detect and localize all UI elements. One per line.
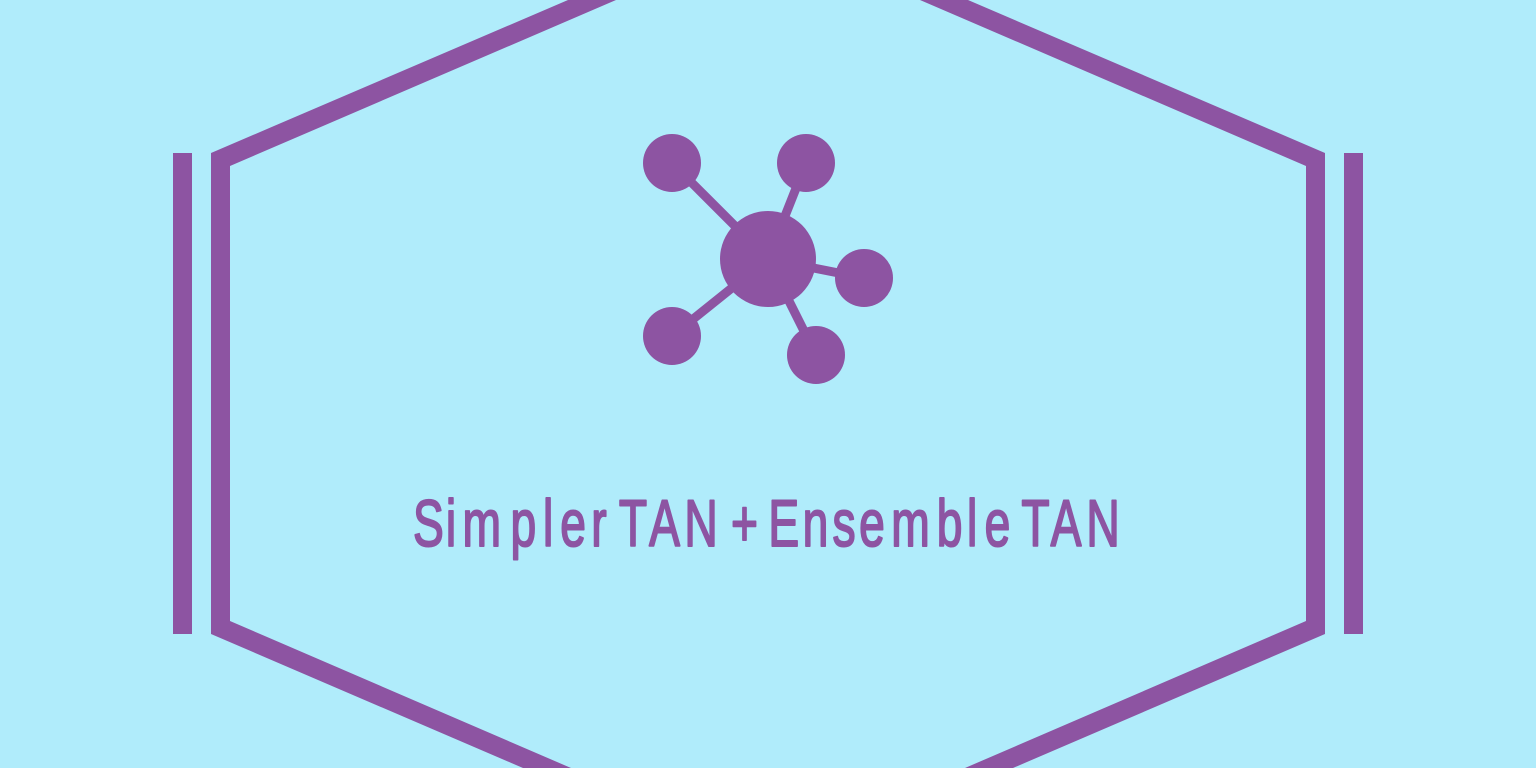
icon node bottom left	[643, 307, 701, 365]
icon node top left	[643, 134, 701, 192]
title: Simpler TAN + Ensemble TAN	[413, 487, 1120, 561]
left outer bar	[173, 153, 192, 634]
icon node right	[835, 249, 893, 307]
left hexagon edge	[211, 0, 616, 768]
icon hub node	[720, 211, 816, 307]
icon: network hub	[643, 134, 893, 384]
right hexagon edge	[920, 0, 1325, 768]
icon node bottom right	[787, 326, 845, 384]
right outer bar	[1344, 153, 1363, 634]
icon connectors	[672, 163, 864, 355]
icon node top right	[777, 134, 835, 192]
frame: hexagon with side bars	[173, 0, 1363, 768]
